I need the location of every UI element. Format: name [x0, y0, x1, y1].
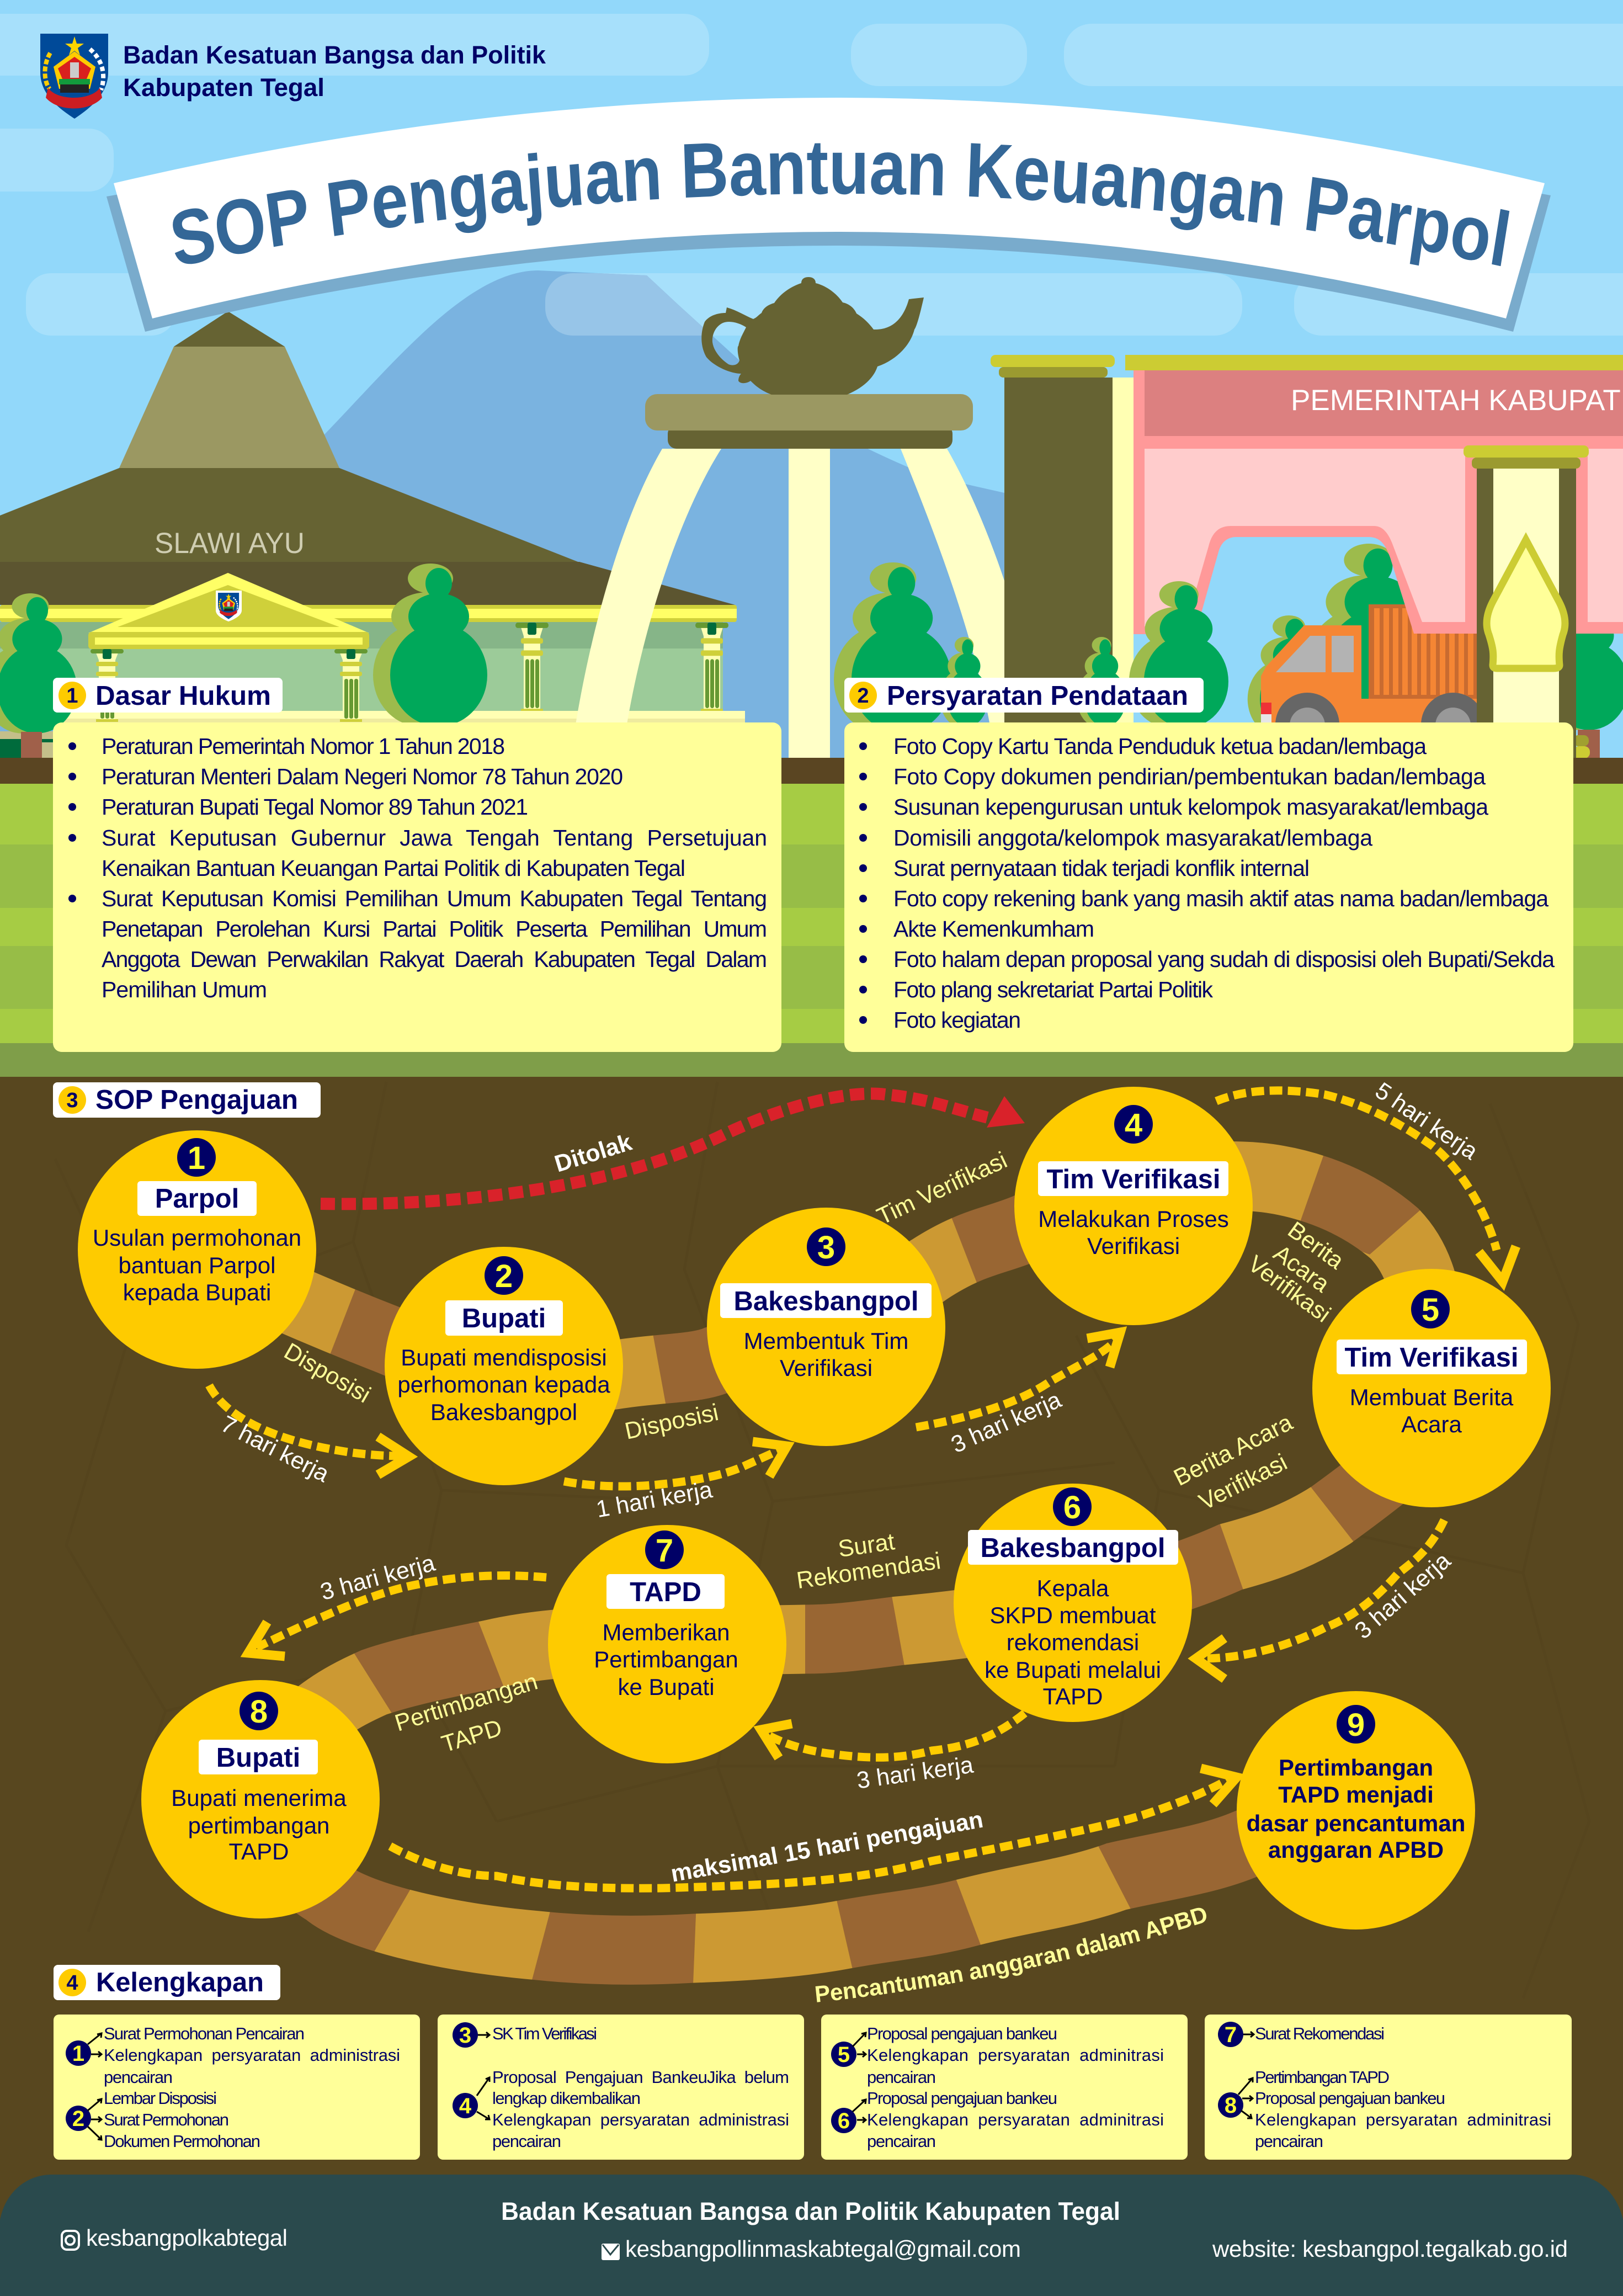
requirements list: Foto Copy dokumen pendirian/pembentukan badan/lembaga [893, 764, 1486, 789]
winding road [281, 1141, 1455, 1985]
requirements list: Foto kegiatan [893, 1007, 1021, 1033]
step 9: pertimbangan: anggaran APBD [1268, 1837, 1444, 1863]
step 7: tapd: Pertimbangan [594, 1646, 738, 1672]
heading: dasar hukum: Dasar Hukum [95, 681, 271, 711]
step 2: bupati: Bupati mendisposisi [401, 1344, 607, 1370]
teapot [701, 277, 924, 395]
panel: kelengkapan 3 dan 4: Proposal Pengajuan BankeuJika belum [492, 2068, 789, 2087]
road labels: Tim Verifikasi [873, 1147, 1011, 1230]
step 7: tapd [548, 1525, 786, 1763]
requirements list: Akte Kemenkumham [893, 916, 1094, 942]
requirements list: Susunan kepengurusan untuk kelompok masyarakat/lembaga [893, 794, 1488, 820]
panel: kelengkapan 5 dan 6: Kelengkapan persyaratan adminitrasi [867, 2045, 1164, 2065]
bullets [68, 742, 76, 902]
arrow 8 to 9 [390, 1768, 1237, 1888]
instagram handle: kesbangpolkabtegal [86, 2225, 288, 2251]
panel: kelengkapan 3 dan 4: 4 [459, 2094, 472, 2118]
step 2: bupati: Bakesbangpol [430, 1399, 577, 1425]
wall [0, 622, 723, 649]
heading: persyaratan pendataan: 2 [857, 684, 869, 708]
legal basis list: Surat Keputusan Komisi Pemilihan Umum Kabupaten Tegal Tentang [102, 886, 767, 911]
step 7: tapd: ke Bupati [618, 1674, 715, 1700]
legal basis list: Anggota Dewan Perwakilan Rakyat Daerah Kabupaten Tegal Dalam [102, 947, 767, 972]
legal basis list: Peraturan Menteri Dalam Negeri Nomor 78 Tahun 2020 [102, 764, 623, 789]
step 3: bakesbangpol: Membentuk Tim [744, 1328, 908, 1354]
step 5: tim verifikasi: Membuat Berita [1350, 1384, 1514, 1410]
heading: sop pengajuan: 3 [66, 1089, 78, 1112]
step 6: bakesbangpol: rekomendasi [1007, 1629, 1139, 1655]
panel: kelengkapan 3 dan 4: SK Tim Verifikasi [492, 2024, 597, 2043]
requirements list: Foto plang sekretariat Partai Politik [893, 977, 1213, 1002]
panel: kelengkapan 1 dan 2: 2 [72, 2107, 84, 2131]
clouds [0, 14, 1623, 336]
step 3: bakesbangpol: Bakesbangpol [734, 1287, 918, 1316]
requirements list [893, 734, 1555, 1033]
requirements list: Foto Copy Kartu Tanda Penduduk ketua badan/lembaga [893, 734, 1427, 759]
legal basis list: Peraturan Pemerintah Nomor 1 Tahun 2018 [102, 734, 505, 759]
step 1: parpol: kepada Bupati [123, 1279, 271, 1305]
roof label: SLAWI AYU [155, 527, 305, 560]
step 6: bakesbangpol: TAPD [1043, 1683, 1103, 1709]
legal basis list: Penetapan Perolehan Kursi Partai Politik Peserta Pemilihan Umum [102, 916, 767, 942]
step 6: bakesbangpol: Kepala [1037, 1575, 1109, 1601]
truck wheels [1275, 693, 1485, 757]
road labels: Verifikasi [1243, 1251, 1335, 1328]
panel: persyaratan pendataan [844, 678, 1573, 1052]
panel: kelengkapan 1 dan 2: Lembar Disposisi [104, 2088, 217, 2108]
step 6: bakesbangpol [954, 1484, 1192, 1722]
panel: kelengkapan 5 dan 6: 6 [838, 2109, 850, 2133]
step 2: bupati [385, 1247, 623, 1485]
step 5: tim verifikasi [1312, 1269, 1551, 1507]
step 6: bakesbangpol: 6 [1063, 1490, 1081, 1526]
step 2: bupati: perhomonan kepada [397, 1372, 610, 1397]
panel: kelengkapan 1 dan 2: Surat Permohonan Pencairan [104, 2024, 305, 2043]
footer [0, 2175, 1623, 2296]
panel: kelengkapan 7 dan 8: Pertimbangan TAPD [1255, 2068, 1390, 2087]
left foreground [0, 593, 77, 759]
arrow 6 to 7 [761, 1713, 1025, 1794]
step 8: bupati: pertimbangan [188, 1813, 329, 1838]
arrow: ditolak (red): Ditolak [551, 1129, 635, 1178]
mountain [0, 270, 1010, 758]
step 8: bupati: TAPD [229, 1838, 289, 1864]
beam [0, 605, 737, 622]
soil cracks [55, 1082, 1589, 1998]
roof tip [174, 311, 285, 347]
icon: instagram [62, 2231, 79, 2250]
logo [40, 34, 108, 119]
truck windows [1276, 636, 1326, 672]
truck [1261, 604, 1485, 757]
back columns [515, 623, 549, 712]
wall frame [1134, 370, 1623, 634]
step 4: tim verifikasi [1014, 1087, 1253, 1325]
title banner [107, 98, 1551, 332]
panel: kelengkapan 7 dan 8: 8 [1225, 2093, 1237, 2118]
panel: kelengkapan 7 dan 8 [1205, 2015, 1572, 2160]
gunungan ornament [1487, 540, 1565, 668]
heading: dasar hukum: 1 [66, 684, 78, 708]
heading: kelengkapan: 4 [66, 1971, 78, 1995]
legal basis list: Pemilihan Umum [102, 977, 267, 1002]
panel: kelengkapan 5 dan 6: Proposal pengajuan bankeu [867, 2024, 1057, 2043]
panel: kelengkapan 5 dan 6: Kelengkapan persyaratan adminitrasi [867, 2110, 1164, 2129]
step 9: pertimbangan: TAPD menjadi [1278, 1782, 1434, 1808]
road labels: Surat [837, 1528, 896, 1562]
step 3: bakesbangpol: Verifikasi [780, 1355, 872, 1381]
step 8: bupati: Bupati [216, 1743, 300, 1773]
road labels: Berita [1283, 1216, 1349, 1274]
arrow 5 to 6 [1196, 1520, 1456, 1679]
step 1: parpol: Parpol [155, 1184, 239, 1214]
panel: kelengkapan 5 dan 6: pencairan [867, 2068, 936, 2087]
panel: kelengkapan 7 dan 8: Kelengkapan persyaratan adminitrasi [1255, 2110, 1551, 2129]
road labels: Disposisi [280, 1338, 375, 1409]
soil background [0, 1077, 1623, 2296]
panel: kelengkapan 5 dan 6: pencairan [867, 2132, 936, 2151]
front columns [91, 649, 124, 722]
steps [44, 711, 745, 719]
step 1: parpol [78, 1130, 316, 1369]
step 2: bupati: 2 [495, 1258, 513, 1294]
road labels: Acara [1269, 1240, 1334, 1298]
panel: kelengkapan 1 dan 2: Kelengkapan persyaratan administrasi [104, 2045, 400, 2065]
panel: kelengkapan 1 dan 2: Surat Permohonan [104, 2110, 229, 2129]
row of trees [373, 562, 1228, 734]
step 8: bupati [141, 1680, 380, 1918]
heading: sop pengajuan [53, 1082, 321, 1118]
step 9: pertimbangan: dasar pencantuman [1247, 1810, 1465, 1836]
arrow 8 to 9: maksimal 15 hari pengajuan [669, 1806, 985, 1888]
arches [571, 449, 721, 758]
ground [0, 758, 1623, 1077]
road labels: Pencantuman anggaran dalam APBD [816, 1907, 1206, 2002]
step 6: bakesbangpol: ke Bupati melalui [985, 1657, 1161, 1683]
arrow 3 to 4: 3 hari kerja [947, 1386, 1065, 1458]
step 8: bupati: 8 [250, 1694, 268, 1730]
road labels: Verifikasi [1195, 1449, 1291, 1516]
step 1: parpol: 1 [188, 1140, 205, 1176]
panel: kelengkapan 3 dan 4 [438, 2015, 804, 2160]
monument: teapot tugu [571, 277, 1046, 758]
truck lamp [1261, 703, 1271, 723]
panel: kelengkapan 7 dan 8: Proposal pengajuan bankeu [1255, 2088, 1445, 2108]
heading: kelengkapan [54, 1965, 280, 2000]
step 2: bupati: Bupati [462, 1304, 546, 1333]
arrow 4 to 5: 5 hari kerja [1370, 1077, 1482, 1165]
panel: kelengkapan 7 dan 8: 7 [1225, 2023, 1237, 2047]
panel: dasar hukum [53, 678, 781, 1052]
cloud over mountain [545, 273, 703, 336]
step 5: tim verifikasi: Acara [1401, 1411, 1462, 1437]
requirements list: Foto copy rekening bank yang masih aktif atas nama badan/lembaga [893, 886, 1548, 911]
panel: kelengkapan 7 dan 8: Surat Rekomendasi [1255, 2024, 1385, 2043]
legal basis list: Peraturan Bupati Tegal Nomor 89 Tahun 2021 [102, 794, 528, 820]
truck cargo [1369, 604, 1477, 699]
heading: sop pengajuan: SOP Pengajuan [95, 1085, 298, 1115]
panel: kelengkapan 1 dan 2: pencairan [104, 2068, 173, 2087]
step 4: tim verifikasi: Verifikasi [1087, 1233, 1180, 1259]
step 3: bakesbangpol [707, 1208, 945, 1446]
step 1: parpol: Usulan permohonan [93, 1225, 301, 1251]
arrows: dashed timeline [209, 1077, 1516, 1888]
arrow 7 to 8: 3 hari kerja [317, 1550, 438, 1606]
building: kantor pemerintah kabupaten [991, 355, 1623, 758]
pedestal [668, 425, 952, 449]
heading: dasar hukum [53, 678, 283, 713]
step 5: tim verifikasi: Tim Verifikasi [1344, 1343, 1519, 1373]
title: SOP Pengajuan Bantuan Keuangan Parpol [173, 143, 1510, 266]
step 9: pertimbangan: 9 [1347, 1707, 1365, 1743]
step 4: tim verifikasi: Tim Verifikasi [1046, 1165, 1221, 1194]
arrow 1 to 2 [209, 1385, 409, 1487]
road labels [258, 1125, 1371, 2002]
panel: kelengkapan 1 dan 2: Dokumen Permohonan [104, 2132, 260, 2151]
header organisation name: Badan Kesatuan Bangsa dan Politik [123, 41, 546, 69]
step 8: bupati: Bupati menerima [171, 1785, 347, 1811]
pediment emblem [216, 591, 242, 621]
step 6: bakesbangpol: SKPD membuat [989, 1602, 1156, 1628]
legal basis list: Kenaikan Bantuan Keuangan Partai Politik di Kabupaten Tegal [102, 855, 685, 881]
road labels: TAPD [439, 1714, 505, 1758]
panel: kelengkapan 5 dan 6: 5 [838, 2043, 850, 2067]
icon: mail [602, 2244, 620, 2260]
tower [1004, 378, 1113, 758]
step 1: parpol: bantuan Parpol [119, 1252, 275, 1278]
requirements list: Surat pernyataan tidak terjadi konflik internal [893, 855, 1310, 881]
arrow 5 to 6: 3 hari kerja [1350, 1547, 1456, 1644]
legal basis list [102, 734, 767, 1002]
arrow 3 to 4 [916, 1332, 1120, 1458]
panel: kelengkapan 3 dan 4: lengkap dikembalikan [492, 2088, 641, 2108]
step 4: tim verifikasi: 4 [1125, 1107, 1142, 1143]
step 4: tim verifikasi: Melakukan Proses [1038, 1206, 1229, 1232]
road labels: Berita Acara [1169, 1409, 1297, 1491]
pillar [1477, 469, 1493, 758]
legal basis list: Surat Keputusan Gubernur Jawa Tengah Tentang Persetujuan [102, 825, 767, 851]
arrow 7 to 8 [248, 1550, 546, 1656]
requirements list: Domisili anggota/kelompok masyarakat/lembaga [893, 825, 1372, 851]
arrow 6 to 7: 3 hari kerja [855, 1752, 975, 1794]
step 9: pertimbangan [1237, 1691, 1475, 1930]
footer title: Badan Kesatuan Bangsa dan Politik Kabupaten Tegal [501, 2197, 1120, 2225]
trees behind government building [1248, 544, 1623, 758]
heading: kelengkapan: Kelengkapan [96, 1968, 264, 1997]
pediment [88, 573, 369, 633]
arrow 1 to 2: 7 hari kerja [217, 1411, 333, 1487]
road labels: Disposisi [622, 1399, 721, 1445]
truck cab [1261, 625, 1361, 724]
panel: kelengkapan 1 dan 2 [54, 2015, 420, 2160]
step 7: tapd: 7 [656, 1533, 673, 1569]
step 5: tim verifikasi: 5 [1422, 1292, 1439, 1328]
road labels: Pertimbangan [392, 1668, 541, 1737]
step 9: pertimbangan: Pertimbangan [1279, 1755, 1433, 1781]
email: kesbangpollinmaskabtegal@gmail.com [625, 2236, 1021, 2262]
header organisation name [123, 41, 546, 102]
arrow 4 to 5 [1216, 1077, 1516, 1282]
building: pendopo Slawi Ayu [0, 311, 745, 724]
header organisation name: Kabupaten Tegal [123, 73, 324, 102]
panel: kelengkapan 3 dan 4: 3 [459, 2023, 471, 2048]
road labels: Rekomendasi [795, 1548, 943, 1594]
panel: kelengkapan 3 dan 4: pencairan [492, 2132, 561, 2151]
panel: kelengkapan 3 dan 4: Kelengkapan persyaratan administrasi [492, 2110, 789, 2129]
sky background [0, 0, 1623, 773]
bullets [859, 742, 867, 1024]
banner [114, 98, 1545, 318]
panel: kelengkapan 7 dan 8: pencairan [1255, 2132, 1323, 2151]
arrow 2 to 3 [564, 1442, 787, 1523]
panel: kelengkapan 5 dan 6 [821, 2015, 1188, 2160]
panel: kelengkapan 5 dan 6: Proposal pengajuan bankeu [867, 2088, 1057, 2108]
panel: kelengkapan 1 dan 2: 1 [72, 2042, 84, 2066]
step 3: bakesbangpol: 3 [817, 1230, 835, 1266]
heading: persyaratan pendataan: Persyaratan Pendataan [887, 681, 1188, 711]
step 6: bakesbangpol: Bakesbangpol [981, 1533, 1165, 1563]
main roof [0, 468, 579, 562]
step 7: tapd: TAPD [630, 1577, 701, 1607]
roof tower [119, 347, 339, 468]
wall panels [1145, 449, 1465, 626]
step 7: tapd: Memberikan [602, 1619, 730, 1645]
requirements list: Foto halam depan proposal yang sudah di disposisi oleh Bupati/Sekda [893, 947, 1555, 972]
arrow 2 to 3: 1 hari kerja [594, 1476, 715, 1523]
banner shadow [107, 131, 1551, 332]
arrow: ditolak (red) [321, 1094, 1025, 1204]
website: website: kesbangpol.tegalkab.go.id [1212, 2236, 1568, 2262]
